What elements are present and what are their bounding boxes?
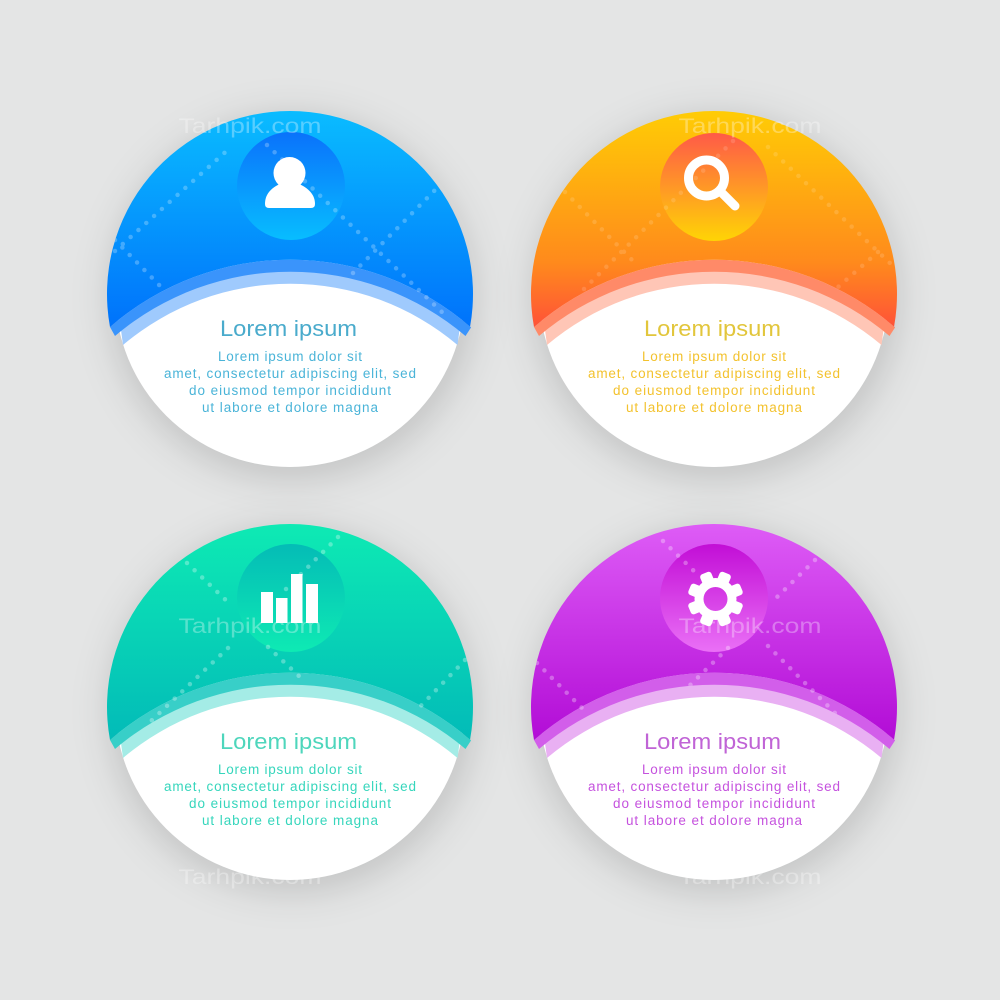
body text: Lorem ipsum dolor sit	[642, 349, 786, 364]
panel: teal card	[107, 524, 474, 892]
icon disc	[237, 544, 345, 652]
mid band	[534, 673, 895, 749]
coloured cap	[531, 524, 897, 740]
light band	[121, 684, 460, 758]
body text	[588, 349, 840, 415]
white circle	[115, 117, 465, 467]
watermarks: Tarhpik.com	[678, 115, 822, 138]
white circle	[115, 530, 465, 880]
heading: Lorem ipsum	[220, 729, 357, 754]
body text	[588, 762, 840, 828]
icon disc	[660, 133, 768, 241]
shadow	[534, 528, 898, 892]
icon disc	[237, 132, 345, 240]
body text: ut labore et dolore magna	[202, 400, 378, 415]
coloured cap	[107, 524, 473, 740]
watermarks: Tarhpik.com	[678, 615, 822, 638]
light band	[121, 271, 460, 345]
watermarks: Tarhpik.com	[178, 115, 322, 138]
icon disc	[660, 544, 768, 652]
mid band	[534, 260, 895, 336]
body text: do eiusmod tempor incididunt	[613, 796, 815, 811]
body text: do eiusmod tempor incididunt	[189, 383, 391, 398]
body text	[164, 762, 416, 828]
watermarks: Tarhpik.com	[678, 866, 822, 889]
body text: amet, consectetur adipiscing elit, sed	[164, 779, 416, 794]
coloured cap	[531, 111, 897, 328]
heading: Lorem ipsum	[644, 316, 781, 341]
light band	[545, 271, 884, 345]
icon: user	[265, 157, 315, 208]
light band	[545, 684, 884, 758]
icon: bar chart	[261, 574, 318, 623]
icon: magnifier	[688, 160, 735, 206]
coloured cap	[107, 111, 473, 328]
panel: orange card	[531, 111, 898, 479]
panel: blue card	[107, 111, 474, 479]
body text: ut labore et dolore magna	[626, 400, 802, 415]
heading: Lorem ipsum	[220, 316, 357, 341]
body text	[164, 349, 416, 415]
body text: do eiusmod tempor incididunt	[189, 796, 391, 811]
mid band	[110, 673, 471, 749]
watermarks	[178, 115, 822, 889]
icon: gear	[687, 571, 744, 627]
heading: Lorem ipsum	[644, 729, 781, 754]
white circle	[539, 530, 889, 880]
panel: purple card	[531, 524, 898, 892]
body text: Lorem ipsum dolor sit	[218, 349, 362, 364]
shadow	[110, 528, 474, 892]
white circle	[539, 117, 889, 467]
body text: Lorem ipsum dolor sit	[642, 762, 786, 777]
shadow	[534, 115, 898, 479]
body text: amet, consectetur adipiscing elit, sed	[588, 366, 840, 381]
watermarks: Tarhpik.com	[178, 615, 322, 638]
body text: amet, consectetur adipiscing elit, sed	[588, 779, 840, 794]
shadow	[110, 115, 474, 479]
body text: do eiusmod tempor incididunt	[613, 383, 815, 398]
watermarks: Tarhpik.com	[178, 866, 322, 889]
mid band	[110, 260, 471, 336]
body text: Lorem ipsum dolor sit	[218, 762, 362, 777]
body text: amet, consectetur adipiscing elit, sed	[164, 366, 416, 381]
body text: ut labore et dolore magna	[626, 813, 802, 828]
body text: ut labore et dolore magna	[202, 813, 378, 828]
